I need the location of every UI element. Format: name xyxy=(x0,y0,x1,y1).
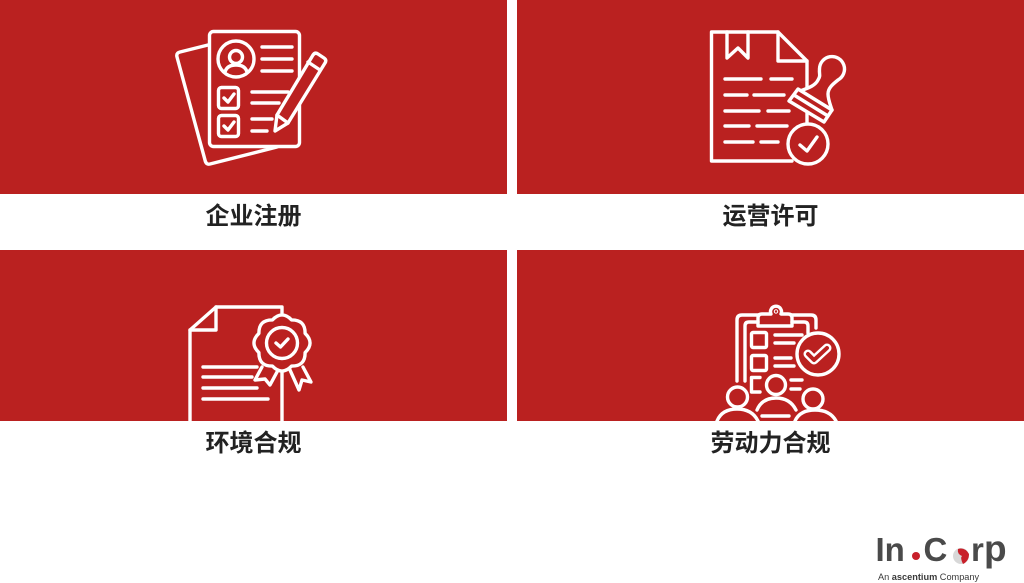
icon: resume form with pencil xyxy=(177,32,326,164)
logo: InCorp xyxy=(876,528,1007,582)
heading: operating permits: 运营许可 xyxy=(722,203,818,230)
heading: environmental compliance: 环境合规 xyxy=(206,430,302,457)
heading: business registration: 企业注册 xyxy=(206,203,302,230)
logo: InCorp: In xyxy=(876,531,905,568)
icon: stamped document xyxy=(712,32,844,164)
panel: environmental compliance xyxy=(0,250,507,421)
logo: InCorp: An ascentium Company xyxy=(878,572,980,582)
panel: business registration xyxy=(0,0,507,194)
heading: labour compliance: 劳动力合规 xyxy=(710,430,830,457)
icon: clipboard checklist with people xyxy=(717,306,839,421)
icon: certificate with rosette xyxy=(190,307,311,421)
logo: InCorp: C xyxy=(924,531,947,568)
logo: InCorp: p xyxy=(984,528,1007,569)
logo: InCorp: r xyxy=(971,531,984,568)
panel: operating permits xyxy=(517,0,1024,194)
panel: labour compliance xyxy=(517,250,1024,421)
